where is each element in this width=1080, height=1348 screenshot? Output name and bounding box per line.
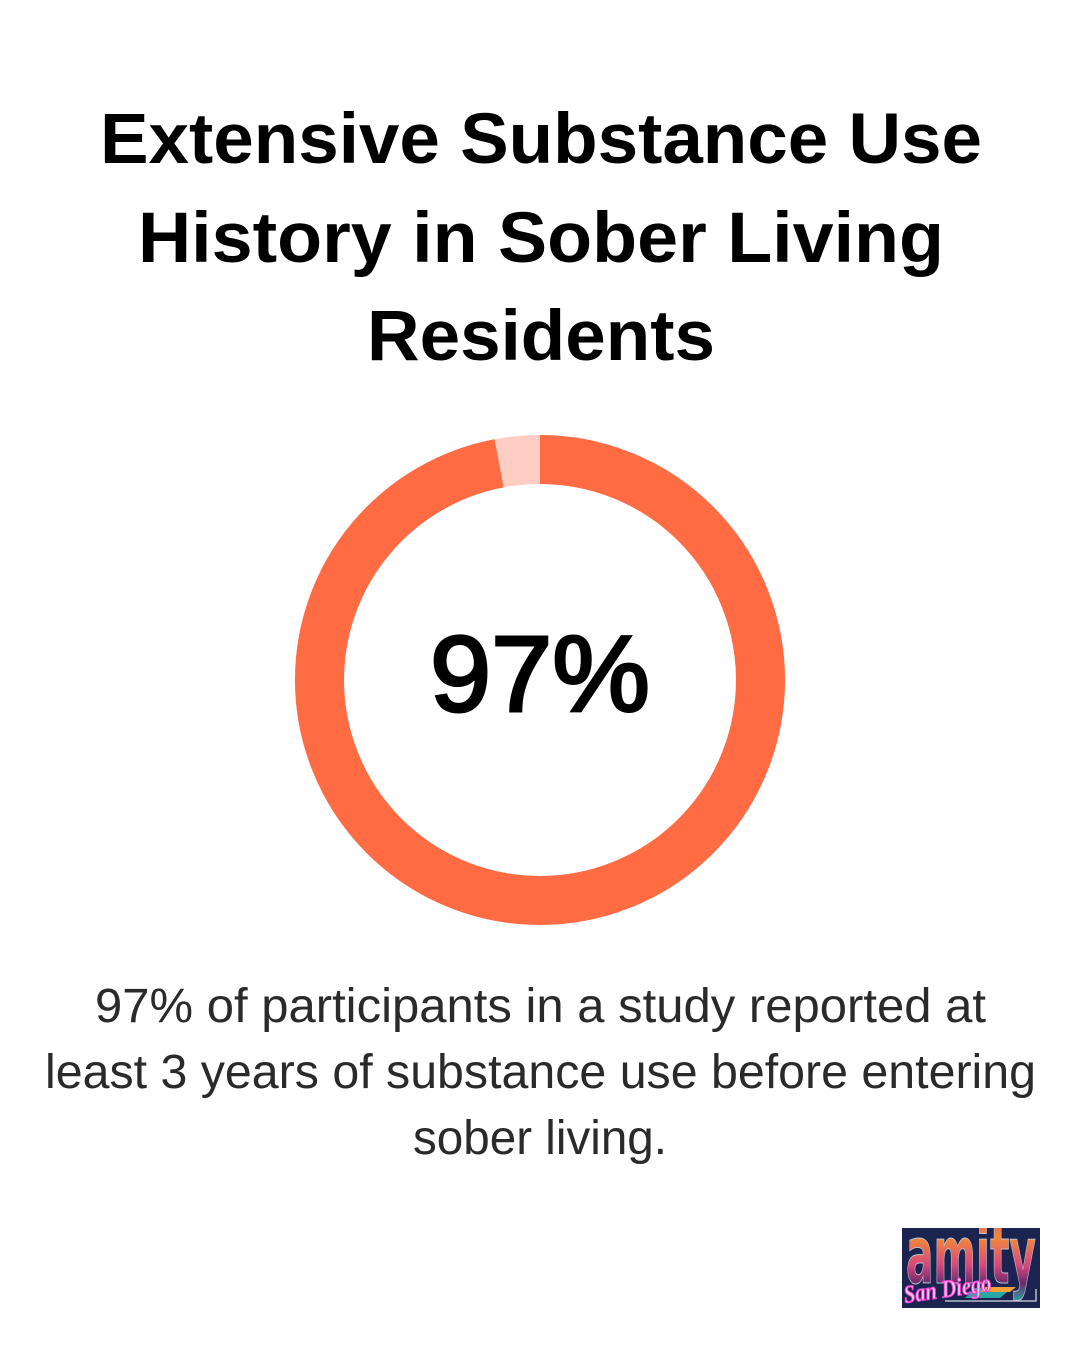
description: [45, 980, 1036, 1165]
title: Residents: [367, 297, 715, 376]
title: History in Sober Living: [138, 199, 944, 278]
description: sober living.: [413, 1112, 667, 1165]
title: [100, 100, 982, 376]
description: least 3 years of substance use before entering: [45, 1046, 1036, 1099]
title: Extensive Substance Use: [100, 100, 982, 179]
donut value: 97%: [430, 613, 650, 734]
donut chart: 97%: [320, 460, 760, 900]
logo: Amity San Diego: San Diego: [902, 1270, 993, 1309]
logo: Amity San Diego: [902, 1228, 1040, 1308]
description: 97% of participants in a study reported at: [95, 980, 986, 1033]
